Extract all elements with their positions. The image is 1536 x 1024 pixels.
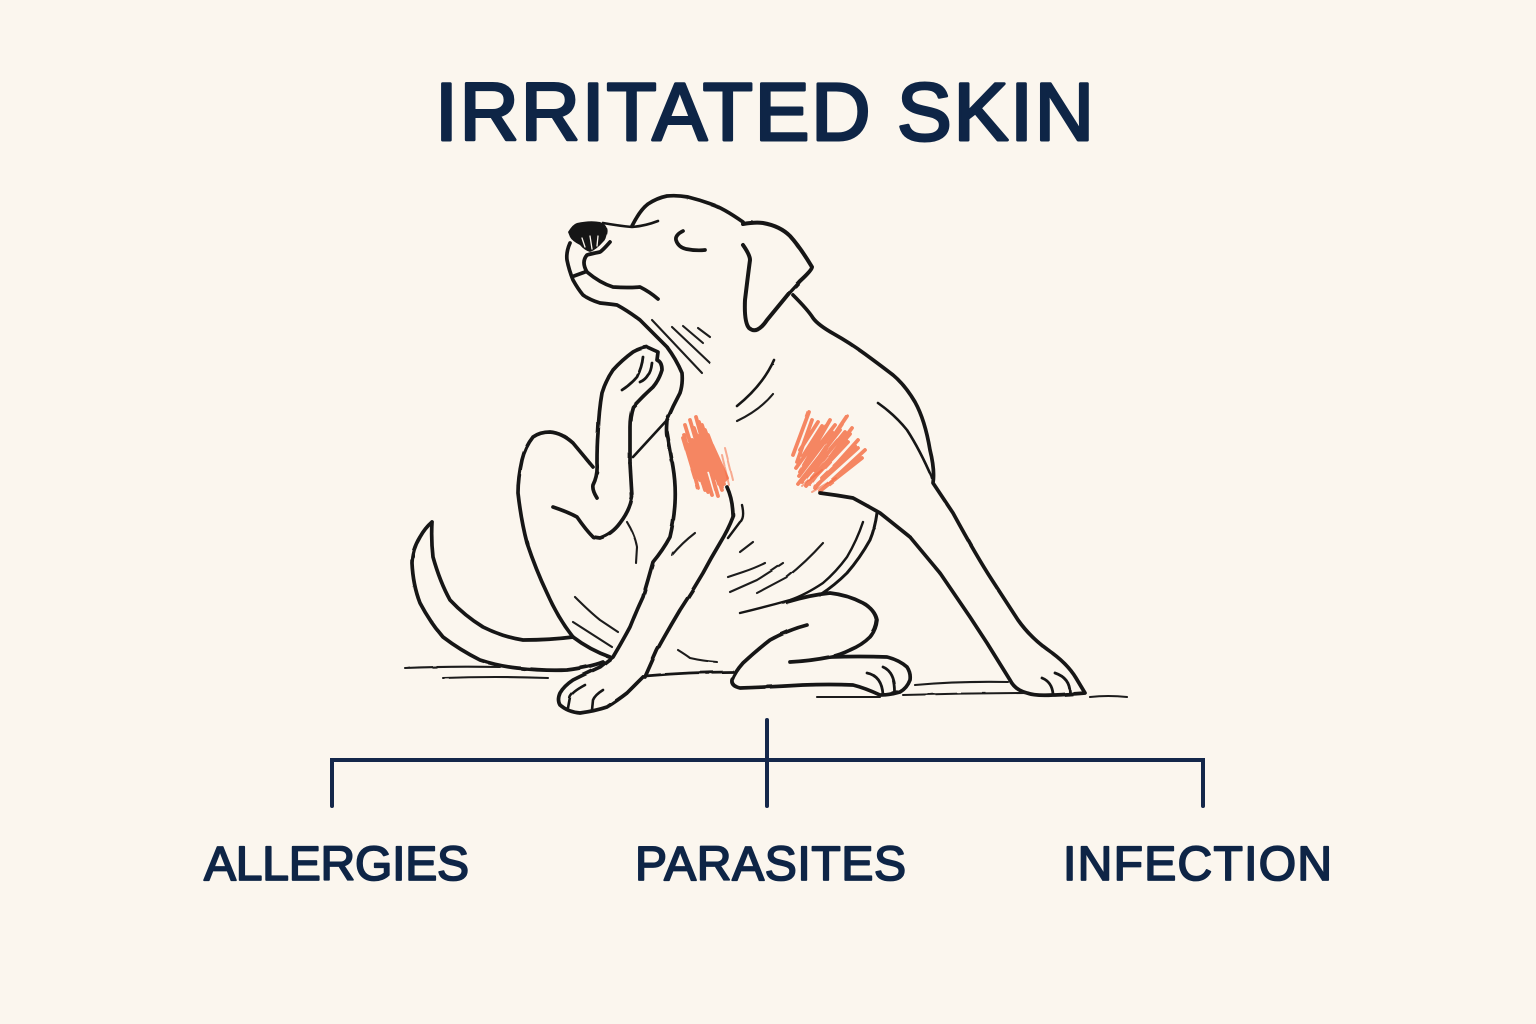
dog scratching paw and foreleg bbox=[593, 347, 667, 498]
illustration: dog scratching bbox=[405, 196, 1127, 713]
dog nose bbox=[568, 221, 607, 252]
dog ear bbox=[743, 223, 812, 330]
ground lines bbox=[405, 667, 1127, 697]
dog front leg and paw bbox=[558, 432, 743, 713]
label: allergies: ALLERGIES bbox=[204, 838, 469, 891]
dog head outline bbox=[567, 196, 743, 436]
irritated patch: shoulder bbox=[793, 412, 865, 492]
label: parasites: PARASITES bbox=[635, 838, 906, 891]
dog closed eye bbox=[676, 231, 705, 250]
label: infection: INFECTION bbox=[1063, 838, 1332, 891]
dog tail bbox=[412, 522, 603, 670]
dog haunch and hind foot bbox=[732, 593, 910, 695]
neck and chest hatching bbox=[652, 320, 774, 421]
dog back and rear leg bbox=[793, 295, 1085, 695]
irritated patch: chest bbox=[683, 417, 733, 496]
dog belly lines bbox=[678, 513, 877, 662]
connector bracket bbox=[332, 720, 1203, 806]
title: IRRITATED SKIN bbox=[435, 67, 1094, 158]
dog raised hind leg bbox=[518, 432, 637, 657]
